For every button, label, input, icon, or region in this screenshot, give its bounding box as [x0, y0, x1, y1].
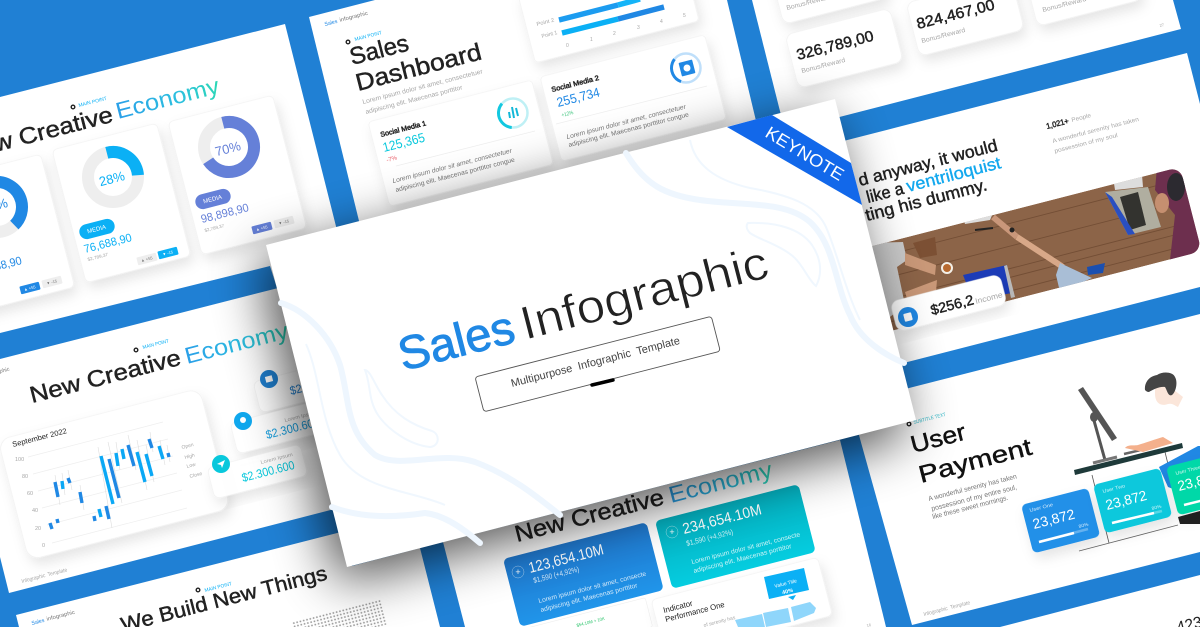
heading: New Creative Economy: [512, 456, 775, 547]
card: User One: [1021, 488, 1100, 553]
card: candlestick chart: 100: [15, 457, 24, 463]
footer: Infographic Template: [923, 600, 971, 618]
label: main point: MAIN POINT: [204, 581, 233, 594]
card: candlestick chart: September 2022: [11, 426, 68, 449]
card: indicator performance: 40%: [782, 588, 794, 596]
card: value bottom: Lorem Ipsum: [260, 452, 293, 466]
card: blue metric: +: [515, 567, 521, 577]
subtitle box: [475, 316, 720, 412]
card: Social Media 2: adipiscing elit. Maecenas porttitor congue: [568, 111, 690, 149]
card: Social Media 1: 125,365: [381, 130, 426, 155]
slide tag: Sales: [324, 19, 338, 28]
card: candlestick chart: 40: [32, 508, 38, 514]
intro text: adipiscing elit. Maecenas porttitor: [365, 84, 464, 116]
card: candlestick chart: Low: [186, 462, 197, 470]
card: User Two: [1093, 468, 1172, 533]
heading: quote: ventriloquist: [904, 153, 1003, 196]
card: 326,789,00: 326,789,00: [795, 28, 876, 64]
card: donut 28 percent: $2,789,37: [87, 252, 109, 262]
card: donut 28 percent: MEDIA: [87, 225, 107, 235]
card: teal metric: Lorem ipsum dolor sit amet, consecte: [691, 531, 801, 566]
heading: Sales Dashboard: Sales: [347, 30, 412, 71]
card: value middle: Lorem Ipsum: [284, 410, 316, 424]
card: Social Media 1: adipiscing elit. Maecenas porttitor congue: [395, 156, 516, 194]
description: like these sweet mornings.: [932, 495, 1009, 521]
panel: bottom-center slide creative economy cards: [443, 440, 886, 627]
card: blue metric: 123,654.10M: [527, 541, 606, 577]
card: Social Media 2: Social Media 2: [551, 75, 600, 94]
card: donut 28 percent: ▲ +55: [140, 255, 154, 263]
card: candlestick chart: High: [184, 453, 196, 461]
footer: Infographic Template: [21, 567, 68, 585]
base behind green card: [1178, 511, 1200, 524]
heading: Sales Infographic: Infographic: [514, 235, 774, 350]
stat: people: People: [1071, 113, 1093, 124]
card: User Two: User Two: [1102, 483, 1126, 495]
card: Social Media 2: Lorem ipsum dolor sit amet, consectetuer: [566, 103, 687, 141]
heading: New Creative Economy: New Creative: [27, 344, 183, 408]
panel: bottom-left slide We Build New Things: [16, 531, 440, 627]
card: blue metric: adipiscing elit. Maecenas porttitor: [540, 582, 639, 614]
card: teal metric: +: [669, 527, 675, 537]
card: User Two: 80%: [1151, 504, 1162, 511]
card: candlestick chart: 80: [22, 474, 28, 480]
card: indicator performance: Value Title: [774, 578, 798, 590]
heading: New Creative Economy: Economy: [666, 456, 775, 508]
label: main point: [134, 338, 170, 352]
panel: top-left slide New Creative Economy donuts: [0, 24, 345, 333]
slide tag: infographic: [339, 11, 369, 24]
card: donut 42 percent: ▲ +55: [23, 284, 37, 292]
card: teal metric: adipiscing elit. Maecenas porttitor: [693, 543, 793, 575]
panel: main slide Sales Infographic: [266, 99, 916, 567]
decorative blob behind cards: [1159, 446, 1200, 500]
card: donut 70 percent: ▲ +55: [255, 224, 269, 232]
slide tag: Sales: [31, 618, 45, 627]
heading: quote: like a: [864, 179, 906, 207]
description: A wonderful serenity has taken: [928, 474, 1018, 503]
card: chart points: 0: [566, 43, 569, 49]
heading: Sales Infographic: Sales: [392, 300, 520, 381]
card: chart points: 1: [590, 37, 593, 43]
card: User One: 80%: [1078, 522, 1089, 529]
label: main point: MAIN POINT: [78, 96, 108, 109]
card: chart points: 2: [613, 31, 616, 37]
slide tag: [324, 11, 369, 28]
card: User Three: [1166, 450, 1200, 515]
card: User One: 23,872: [1031, 506, 1077, 532]
card: 326,789,00: Bonus/Reward: [801, 57, 846, 75]
card: donut 28 percent: 76,688,90: [83, 232, 133, 256]
stat: people: possession of my soul: [1054, 133, 1118, 155]
card: indicator performance: [651, 557, 833, 627]
card: User One: User One: [1029, 502, 1054, 514]
card: User Two: 23,872: [1104, 487, 1149, 513]
card: candlestick chart: Open: [181, 442, 195, 451]
panel: left slide candlestick chart: [0, 285, 354, 593]
card: donut 28 percent: [52, 123, 191, 283]
stat: people: 1,021+: [1045, 116, 1070, 131]
card: small green value: [527, 598, 653, 627]
card: donut 42 percent: [0, 154, 75, 314]
card: donut 70 percent: MEDIA: [203, 195, 223, 205]
card: candlestick chart: 20: [35, 526, 41, 532]
card: donut 28 percent: ▼ -15: [162, 249, 174, 257]
card: indicator performance: Performance One: [664, 600, 726, 624]
card: teal metric: [655, 484, 816, 589]
card: candlestick chart: 60: [27, 491, 33, 497]
stat: people: [1045, 113, 1140, 155]
description: possession of my entire soul,: [931, 484, 1018, 513]
intro text: Lorem ipsum dolor sit amet, consectetuer: [362, 68, 484, 106]
stat: people: A wonderful serenity has taken: [1052, 117, 1140, 145]
card: Social Media 1: Social Media 1: [380, 120, 427, 139]
card: chart points: [518, 0, 699, 63]
label: main point: MAIN POINT: [354, 30, 383, 43]
heading: New Creative Economy: [0, 72, 222, 165]
card: income: Income: [974, 290, 1004, 306]
subtitle box: Multipurpose Infographic Template: [510, 335, 681, 390]
heading: User Payment: Payment: [916, 434, 1035, 489]
panel: bottom-right slide User Payment: [850, 314, 1200, 625]
heading: Sales Dashboard: Dashboard: [353, 39, 484, 97]
heading: quote: ting his dummy.: [863, 175, 989, 225]
heading: New Creative Economy: Economy: [113, 72, 222, 124]
card: income: $256,2: [929, 291, 976, 318]
card: blue metric: Lorem ipsum dolor sit amet, consecte: [538, 570, 647, 605]
card: donut 42 percent: ▼ -15: [46, 278, 58, 286]
panel: bottom-right corner slide: [1000, 575, 1200, 627]
heading: New Creative Economy: [27, 317, 291, 408]
card: value bottom: [207, 444, 308, 499]
card: candlestick chart: 0: [42, 543, 45, 549]
card: value middle: [230, 399, 331, 454]
card: donut 70 percent: [168, 95, 307, 255]
decorative contour lines: [281, 140, 904, 543]
page number: 27: [1159, 22, 1165, 28]
card: Social Media 1: -7%: [386, 155, 398, 164]
heading: New Creative Economy: Economy: [182, 317, 291, 369]
card: donut 70 percent: 98,898,90: [200, 202, 250, 226]
card: donut 70 percent: ▼ -15: [278, 218, 290, 226]
card: chart points: 5: [683, 13, 686, 19]
heading: User Payment: User: [908, 419, 969, 459]
card: Social Media 2: +12%: [561, 110, 574, 119]
subtitle label: SUBTITLE TEXT: [913, 412, 946, 426]
heading: quote: d anyway, it would: [856, 136, 1000, 190]
card: donut 70 percent: $2,789,37: [204, 223, 225, 233]
panel: top-center slide Sales Dashboard: [309, 0, 757, 225]
card: value middle: $2.300.600: [264, 415, 321, 442]
card: User Three: User Three: [1175, 465, 1200, 477]
card: 326,789,00: [785, 8, 903, 88]
card: chart points: 3: [637, 25, 640, 31]
card: donut 70 percent: 70%: [213, 138, 243, 159]
card: blue metric: $1,590 (+4,92%): [532, 564, 580, 585]
card: teal metric: 234,654.10M: [681, 501, 763, 538]
heading: New Creative Economy: New Creative: [512, 484, 666, 547]
card: candlestick chart: [0, 388, 230, 560]
ribbon: Keynote: KEYNOTE: [762, 122, 848, 185]
card: value bottom: $2.300.600: [240, 458, 296, 485]
slide tag: infographic: [46, 610, 76, 623]
illustration: person at desk: [1074, 373, 1183, 551]
heading: quote: [856, 136, 1003, 225]
slide tag: [31, 610, 76, 627]
card: chart points: 4: [660, 19, 663, 25]
heading: Sales Infographic: [392, 235, 774, 381]
card: Social Media 2: [540, 35, 726, 161]
card: top left bonus: [770, 0, 888, 24]
card: value top: $2.300.600: [288, 371, 345, 398]
card: chart points: Point 1: [541, 30, 558, 40]
card: value top: [253, 358, 354, 413]
panel: top-right slide bonus cards: [752, 0, 1181, 131]
card: Social Media 2: 255,734: [555, 84, 601, 110]
card: donut 28 percent: 28%: [97, 168, 127, 189]
card: 824,467,00: [906, 0, 1024, 56]
card: 824,467,00: Bonus/Reward: [921, 27, 966, 45]
card: indicator performance: Indicator: [662, 599, 694, 615]
card: Social Media 1: Lorem ipsum dolor sit amet, consectetuer: [392, 147, 513, 185]
card: teal metric: $1,590 (+4,92%): [685, 527, 734, 548]
label: main point: MAIN POINT: [142, 338, 170, 351]
ribbon: Keynote: [727, 115, 862, 205]
panel: right slide ventriloquist with photo: [820, 53, 1200, 369]
card: candlestick chart: Close: [189, 471, 203, 480]
description: [928, 474, 1018, 521]
heading: User Payment: [908, 419, 1035, 489]
dotted world map: [292, 599, 388, 627]
card: chart points: Point 2: [536, 18, 555, 28]
card: blue metric: [503, 522, 664, 627]
card: Social Media 1: [368, 80, 553, 206]
photo: handshake over wooden table: [872, 169, 1200, 330]
card: income: [890, 274, 1007, 332]
card: top right bonus: [1024, 0, 1142, 26]
shadow of the main slide: [258, 115, 908, 583]
